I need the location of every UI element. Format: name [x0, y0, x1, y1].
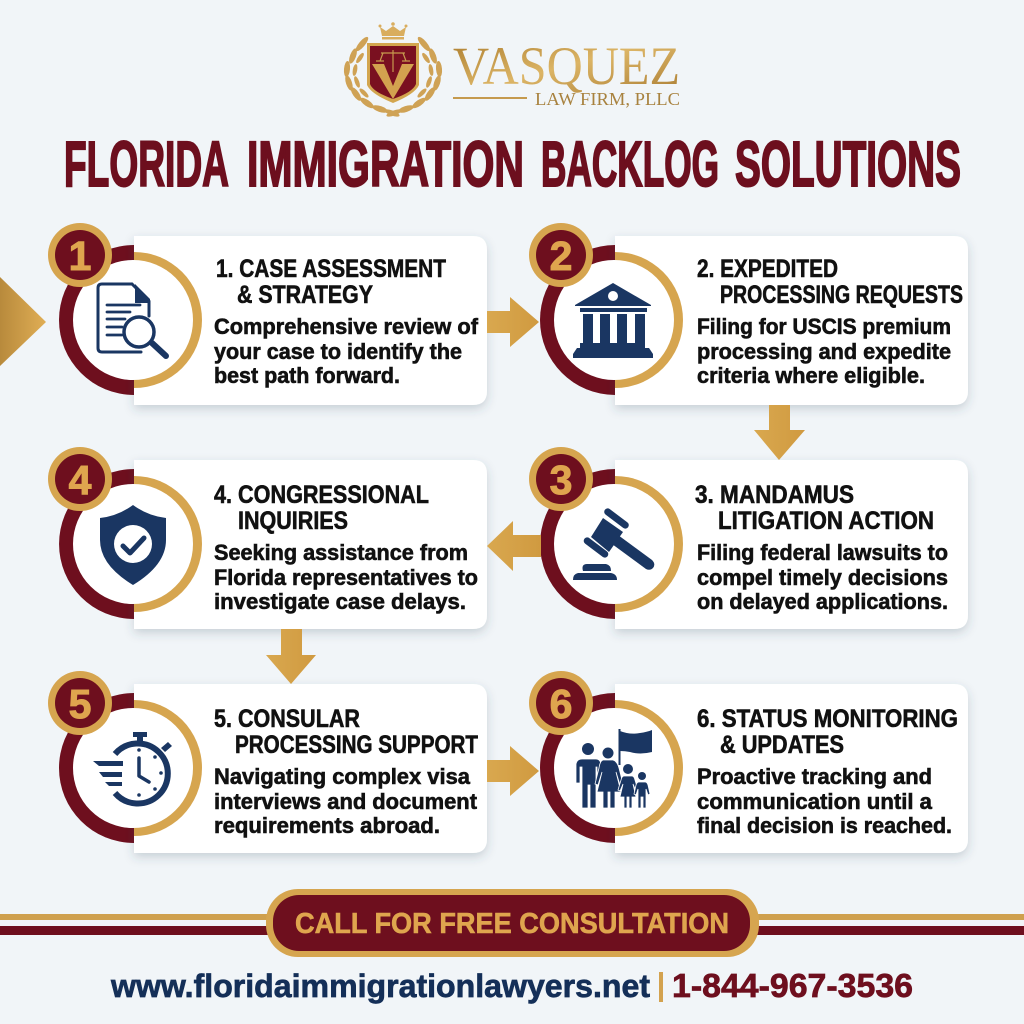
brand name: VASQUEZ: [453, 36, 680, 96]
step 5 panel: [48, 671, 487, 853]
card 3: [615, 460, 968, 629]
body 3: [697, 540, 948, 614]
icon: laurel wreath: [343, 35, 443, 118]
body 1: your case to identify the: [214, 339, 462, 364]
card 5: [134, 684, 487, 853]
icon: stopwatch: [93, 732, 172, 804]
heading 2: 2. EXPEDITED: [697, 255, 838, 283]
heading 5: [214, 705, 478, 759]
icon: crown: [378, 22, 408, 40]
number badge 3: 3: [550, 457, 572, 503]
heading 3: LITIGATION ACTION: [718, 507, 934, 535]
icon: shield with check: [100, 505, 166, 585]
heading 5: PROCESSING SUPPORT: [235, 731, 478, 759]
body 2: criteria where eligible.: [697, 363, 925, 388]
step 6 panel: [529, 671, 968, 853]
number badge 6: [529, 671, 593, 735]
title: BACKLOG: [541, 128, 719, 200]
body 6: communication until a: [697, 789, 933, 814]
heading 5: 5. CONSULAR: [214, 705, 360, 733]
body 2: processing and expedite: [697, 339, 951, 364]
step 3 panel: [529, 447, 968, 629]
logo: Vasquez Law Firm: [343, 22, 680, 118]
body 5: [214, 764, 478, 838]
number badge 5: [48, 671, 112, 735]
icon: shield with scales and V: [367, 43, 419, 103]
body 1: [214, 314, 479, 388]
body 5: interviews and document: [214, 789, 478, 814]
call to action button: [266, 889, 759, 957]
step 2 panel: [529, 223, 968, 405]
body 3: on delayed applications.: [697, 589, 948, 614]
divider: [659, 972, 663, 1002]
arrow: step 5 to 6: [487, 746, 539, 796]
heading 6: & UPDATES: [720, 731, 844, 759]
heading 4: [214, 481, 429, 535]
icon: courthouse: [573, 283, 653, 358]
heading 2: [697, 255, 963, 309]
website: www.floridaimmigrationlawyers.net: [110, 968, 650, 1004]
number badge 4: [48, 447, 112, 511]
arrow: step 1 to 2: [487, 297, 539, 347]
body 6: Proactive tracking and: [697, 764, 932, 789]
brand subtitle: LAW FIRM, PLLC: [535, 89, 680, 109]
body 5: requirements abroad.: [214, 813, 440, 838]
number badge 4: 4: [69, 457, 92, 503]
icon: family with flag: [576, 729, 652, 808]
heading 3: 3. MANDAMUS: [695, 481, 854, 509]
number badge 6: 6: [550, 681, 572, 727]
icon: gavel: [573, 507, 654, 580]
phone number: 1-844-967-3536: [672, 967, 913, 1004]
number badge 2: [529, 223, 593, 287]
arrow: step 3 to 4: [487, 521, 541, 571]
body 5: Navigating complex visa: [214, 764, 471, 789]
body 6: final decision is reached.: [697, 813, 952, 838]
body 3: compel timely decisions: [697, 565, 948, 590]
arrow: left edge triangle: [0, 277, 46, 366]
heading 1: [216, 255, 446, 309]
heading 4: INQUIRIES: [238, 507, 348, 535]
title: FLORIDA: [64, 128, 229, 200]
title: IMMIGRATION: [247, 128, 524, 200]
card 4: [134, 460, 487, 629]
body 2: Filing for USCIS premium: [697, 314, 951, 339]
icon: document with magnifier: [98, 284, 166, 356]
body 4: [214, 540, 478, 614]
step 4 panel: [48, 447, 487, 629]
number badge 3: [529, 447, 593, 511]
body 4: Florida representatives to: [214, 565, 478, 590]
title: [64, 128, 961, 200]
body 2: [697, 314, 951, 388]
arrow: step 4 to 5: [266, 629, 316, 684]
body 1: best path forward.: [214, 363, 400, 388]
call to action button: CALL FOR FREE CONSULTATION: [295, 908, 729, 940]
step 1 panel: [48, 223, 487, 405]
heading 6: 6. STATUS MONITORING: [697, 705, 958, 733]
number badge 1: 1: [69, 233, 91, 279]
body 6: [697, 764, 952, 838]
body 1: Comprehensive review of: [214, 314, 479, 339]
heading 2: PROCESSING REQUESTS: [720, 281, 963, 309]
body 3: Filing federal lawsuits to: [697, 540, 948, 565]
decorative bands: [0, 914, 1024, 935]
heading 6: [697, 705, 958, 759]
body 4: Seeking assistance from: [214, 540, 468, 565]
card 2: [615, 236, 968, 405]
heading 1: & STRATEGY: [237, 281, 373, 309]
number badge 1: [48, 223, 112, 287]
heading 1: 1. CASE ASSESSMENT: [216, 255, 446, 283]
card 1: [134, 236, 487, 405]
number badge 5: 5: [69, 681, 91, 727]
number badge 2: 2: [550, 233, 572, 279]
heading 3: [695, 481, 934, 535]
arrow: step 2 to 3: [754, 405, 805, 460]
card 6: [615, 684, 968, 853]
body 4: investigate case delays.: [214, 589, 466, 614]
heading 4: 4. CONGRESSIONAL: [214, 481, 429, 509]
